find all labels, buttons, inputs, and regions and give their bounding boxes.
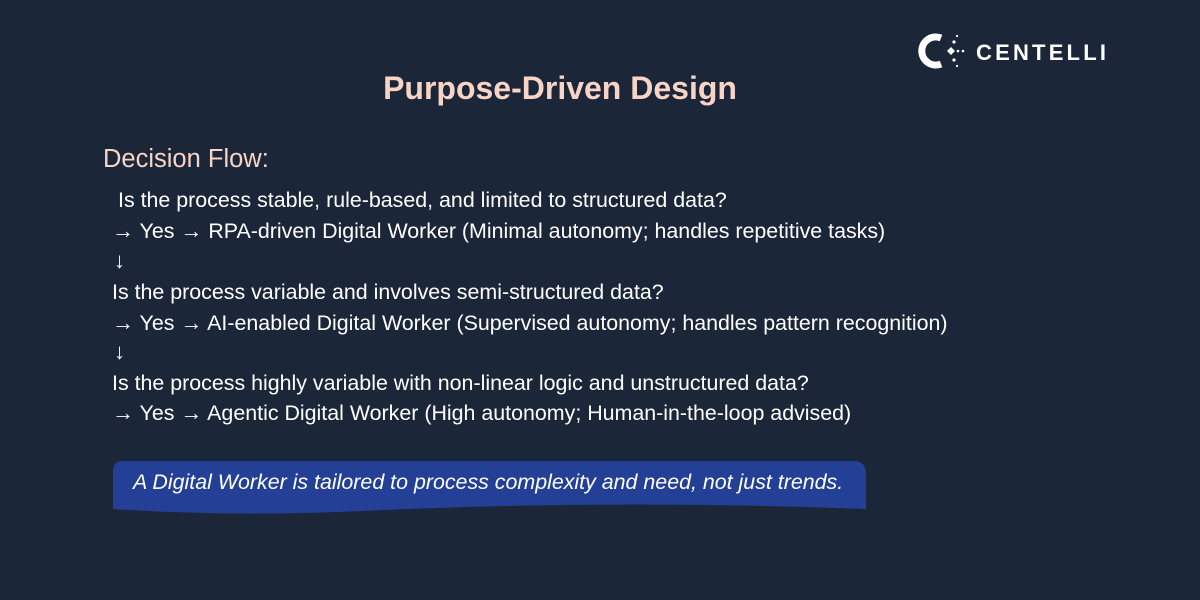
text block: decision flow: → Yes → AI-enabled Digital Worker (Supervised autonomy; handles pattern recognition)	[112, 310, 948, 335]
title: Purpose-Driven Design	[383, 70, 737, 106]
callout	[113, 461, 866, 514]
icon: logo mark	[922, 35, 964, 67]
text block: decision flow: Is the process variable and involves semi-structured data?	[112, 280, 664, 304]
text block: decision flow: Is the process stable, rule-based, and limited to structured data?	[118, 188, 727, 212]
text block: decision flow: ↓	[114, 248, 125, 273]
logo	[918, 34, 1109, 68]
callout: A Digital Worker is tailored to process complexity and need, not just trends.	[133, 470, 843, 494]
text block: decision flow: → Yes → RPA-driven Digital Worker (Minimal autonomy; handles repetitive tasks)	[112, 218, 885, 243]
text block: decision flow: ↓	[114, 339, 125, 364]
heading: decision flow: Decision Flow:	[103, 145, 269, 173]
text block: decision flow: → Yes → Agentic Digital Worker (High autonomy; Human-in-the-loop advised)	[112, 400, 851, 425]
text block: decision flow	[112, 188, 948, 425]
text block: decision flow: Is the process highly variable with non-linear logic and unstructured data?	[112, 371, 809, 395]
logo: CENTELLI	[976, 40, 1109, 65]
